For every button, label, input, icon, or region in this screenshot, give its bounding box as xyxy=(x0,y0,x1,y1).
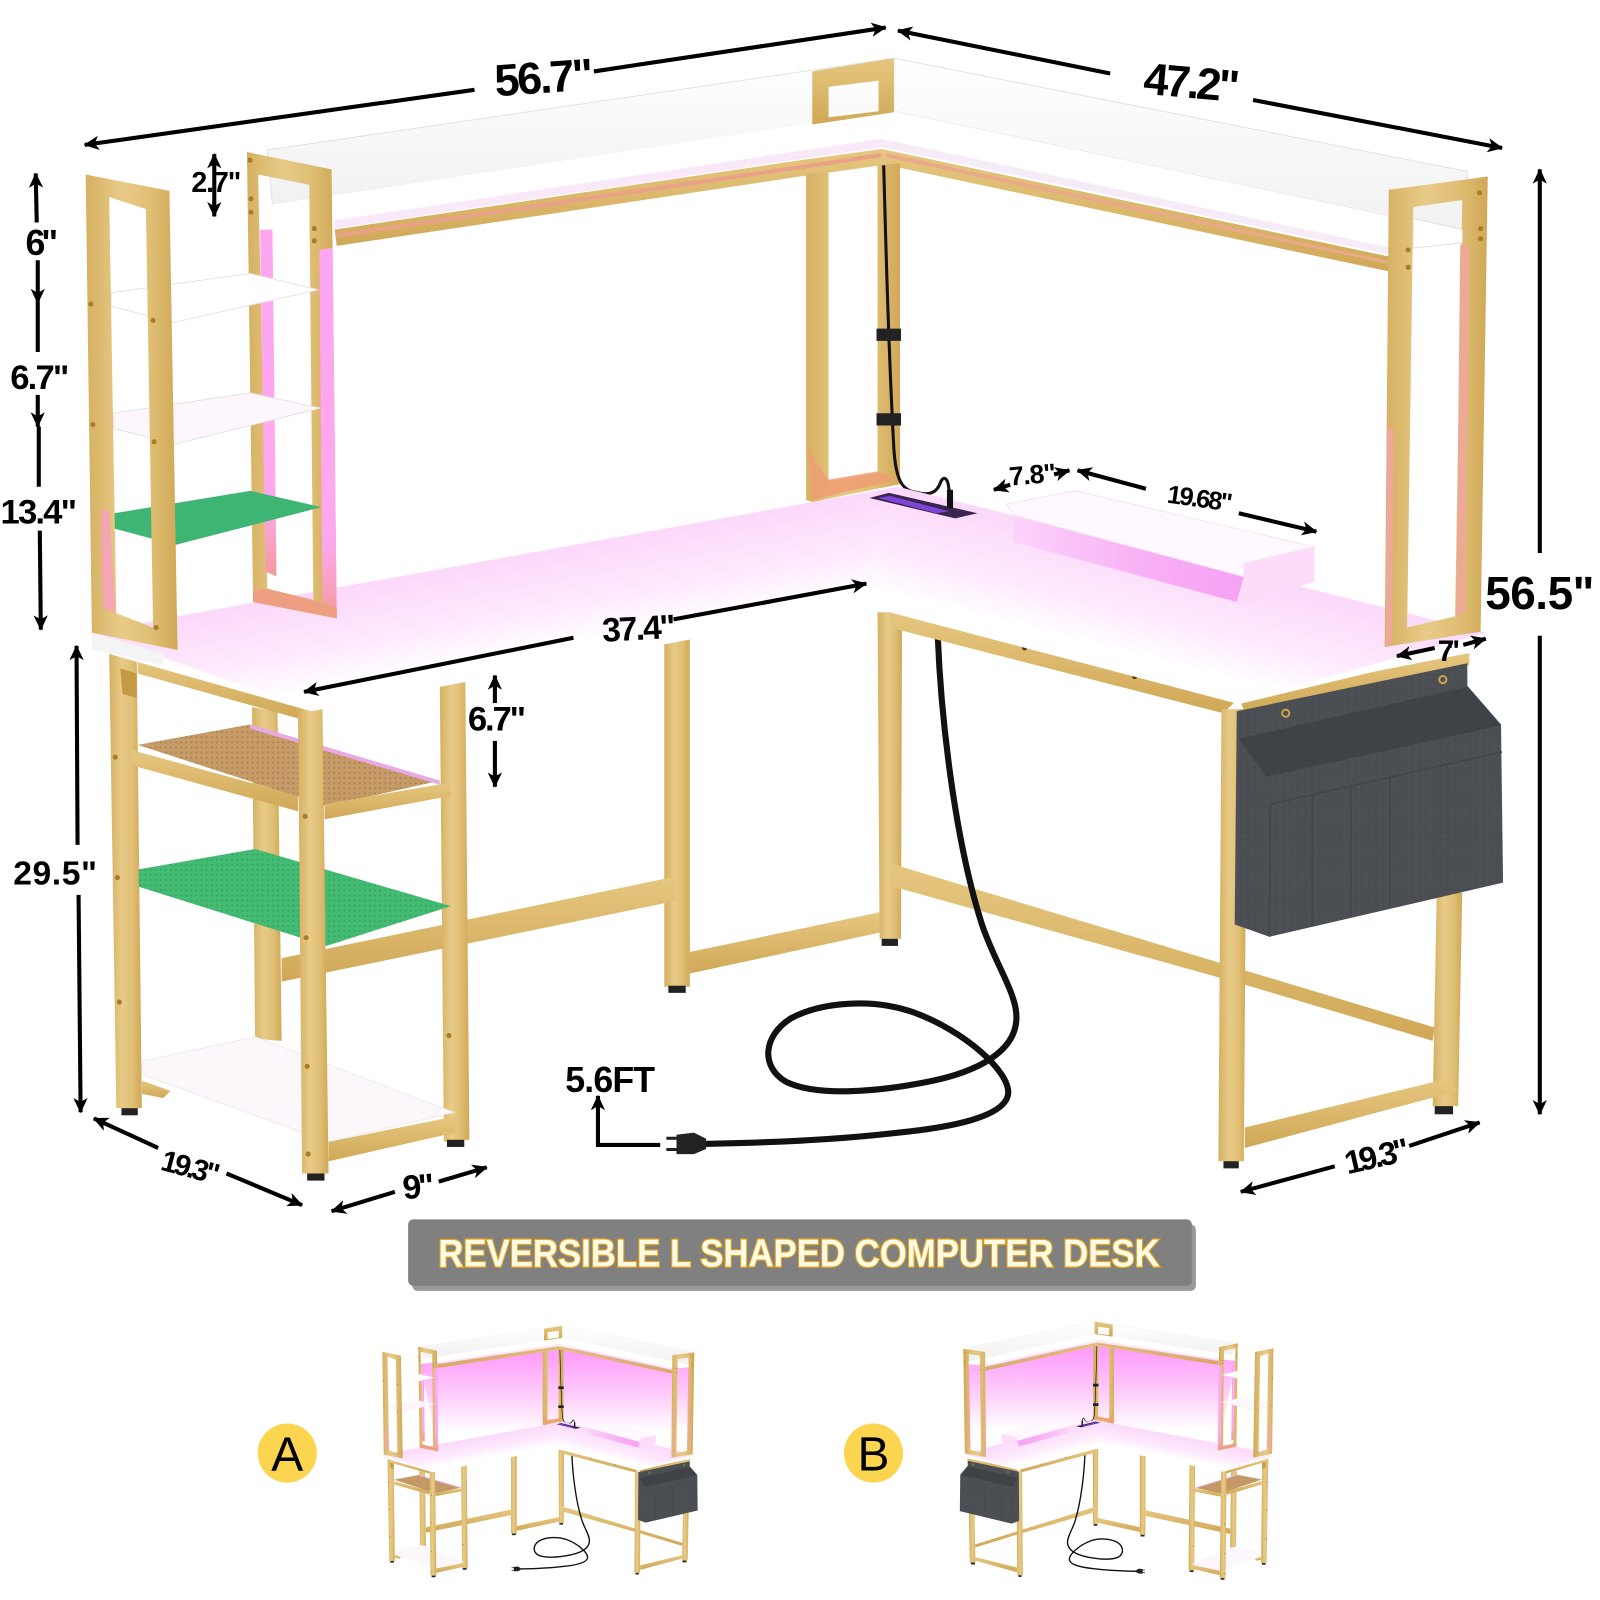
title banner: REVERSIBLE L SHAPED COMPUTER DESK xyxy=(438,1232,1160,1275)
badge B xyxy=(844,1423,903,1483)
cable plug on strip xyxy=(947,490,953,508)
left cabinet rear legs xyxy=(109,653,469,1147)
dimension: overall width 56.7: 56.7" xyxy=(493,48,595,106)
mesh shelf xyxy=(132,724,451,819)
dimension: 7 xyxy=(1397,635,1486,668)
dimension: 6.7 under desk xyxy=(468,676,526,787)
power cord xyxy=(704,636,1016,1144)
corner hutch frame xyxy=(812,58,894,124)
desktop under rails xyxy=(894,612,1469,713)
dimension: 19.3 left depth: 19.3" xyxy=(158,1144,223,1192)
dimension: 6.7 upper: 6.7" xyxy=(10,359,69,397)
variant B desk xyxy=(960,1322,1273,1580)
dimension: 6: 6" xyxy=(26,223,58,263)
dimension: height 56.5: 56.5" xyxy=(1485,567,1594,619)
desktop xyxy=(92,487,1486,711)
dimension: 19.68: 19.68" xyxy=(1166,481,1234,518)
front hutch tower xyxy=(86,174,178,650)
dimension: overall width 56.7 xyxy=(85,28,886,145)
dimension: 2.7 xyxy=(191,154,241,216)
plug xyxy=(666,1133,706,1154)
badge A xyxy=(258,1423,317,1483)
dimension: 7.8 xyxy=(994,458,1069,492)
dimension: 29.5: 29.5" xyxy=(13,856,97,893)
dimension: 2.7: 2.7" xyxy=(191,167,241,199)
front right leg xyxy=(1218,709,1247,1161)
dimension: 19.3 right depth: 19.3" xyxy=(1341,1130,1413,1181)
bottom cabinet shelf xyxy=(142,1037,455,1161)
dimension: cord length 5.6FT xyxy=(565,1060,660,1145)
cable on post xyxy=(884,165,950,502)
cable straps xyxy=(877,329,901,426)
dimension: 19.3 left depth xyxy=(94,1118,302,1205)
power strip xyxy=(869,493,978,518)
dimension: 13.4: 13.4" xyxy=(1,493,77,531)
dimension: 9 xyxy=(332,1167,487,1211)
hutch shelf xyxy=(272,111,1467,255)
green mesh shelf xyxy=(139,849,451,946)
middle and corner legs xyxy=(664,612,902,993)
dimension: 19.3 right depth xyxy=(1241,1122,1480,1192)
dimension: 6.7 under desk: 6.7" xyxy=(468,701,526,739)
tower shelves xyxy=(111,273,320,444)
title banner xyxy=(408,1219,1196,1291)
dimension: 6.7 upper xyxy=(10,303,69,427)
right desk legs and rail xyxy=(1245,893,1462,1148)
corner hutch posts xyxy=(806,163,902,502)
right hutch tower xyxy=(1385,177,1488,647)
green tower shelf xyxy=(114,491,321,545)
storage bag xyxy=(1235,663,1503,937)
foot of front right leg xyxy=(1223,1161,1239,1168)
lower rails xyxy=(282,863,1435,1041)
dimension: cord length 5.6FT: 5.6FT xyxy=(565,1060,655,1100)
hutch gold rails xyxy=(335,149,1392,271)
left cabinet front leg xyxy=(113,706,452,1181)
dimension: 7.8: 7.8" xyxy=(1008,458,1057,492)
dimension: 37.4 xyxy=(304,584,866,692)
dimension: 37.4: 37.4" xyxy=(601,609,677,650)
dimension: 7: 7" xyxy=(1438,635,1460,668)
monitor riser xyxy=(1006,491,1314,608)
dimension: overall depth 47.2 xyxy=(898,31,1502,148)
badge B: B xyxy=(857,1428,889,1481)
variant A desk xyxy=(382,1326,698,1577)
dimension: 9: 9" xyxy=(401,1168,436,1207)
dimension: overall depth 47.2: 47.2" xyxy=(1142,53,1242,112)
dimension: 6 xyxy=(26,173,58,303)
rear hutch tower xyxy=(247,152,337,618)
badge A: A xyxy=(271,1428,303,1481)
dimension: 19.68 xyxy=(1078,470,1316,532)
desk illustration xyxy=(86,58,1503,1181)
hutch back boards xyxy=(267,58,1467,233)
